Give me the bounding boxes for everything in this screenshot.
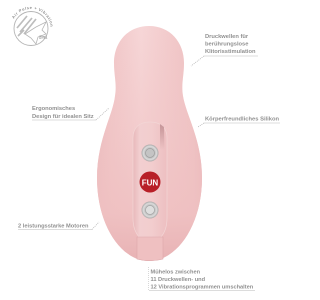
badge: air pulse and vibration: 2in1 xyxy=(39,34,48,40)
control plate xyxy=(133,122,167,260)
badge: air pulse and vibration: Air Pulse + Vibration xyxy=(12,6,52,26)
callout: programs: 11 Druckwellen- und xyxy=(150,277,206,283)
tab xyxy=(137,237,163,260)
callout: ergonomic design: Ergonomisches xyxy=(32,106,75,112)
callout: programs: Mühelos zwischen xyxy=(150,270,201,276)
callout: body-friendly silicone xyxy=(198,116,280,127)
callout: two motors: 2 leistungsstarke Motoren xyxy=(18,224,89,230)
device body xyxy=(97,26,202,261)
callout: programs xyxy=(148,267,255,290)
callout: programs: 12 Vibrationsprogrammen umschalten xyxy=(150,284,254,290)
callout: body-friendly silicone: Körperfreundliches Silikon xyxy=(205,116,280,122)
button: upper xyxy=(142,144,158,162)
button: FUN logo: FUN xyxy=(142,178,158,188)
callout: two motors xyxy=(18,222,99,230)
badge: air pulse and vibration xyxy=(12,6,52,46)
callout: pressure waves: Klitorisstimulation xyxy=(205,49,256,55)
callout: pressure waves: berührungslose xyxy=(205,42,248,48)
callout: ergonomic design: Design für idealen Sitz xyxy=(32,114,94,120)
callout: pressure waves xyxy=(191,34,258,66)
callout: pressure waves: Druckwellen für xyxy=(205,34,249,40)
callout: ergonomic design xyxy=(32,106,109,120)
button: lower xyxy=(142,202,158,218)
